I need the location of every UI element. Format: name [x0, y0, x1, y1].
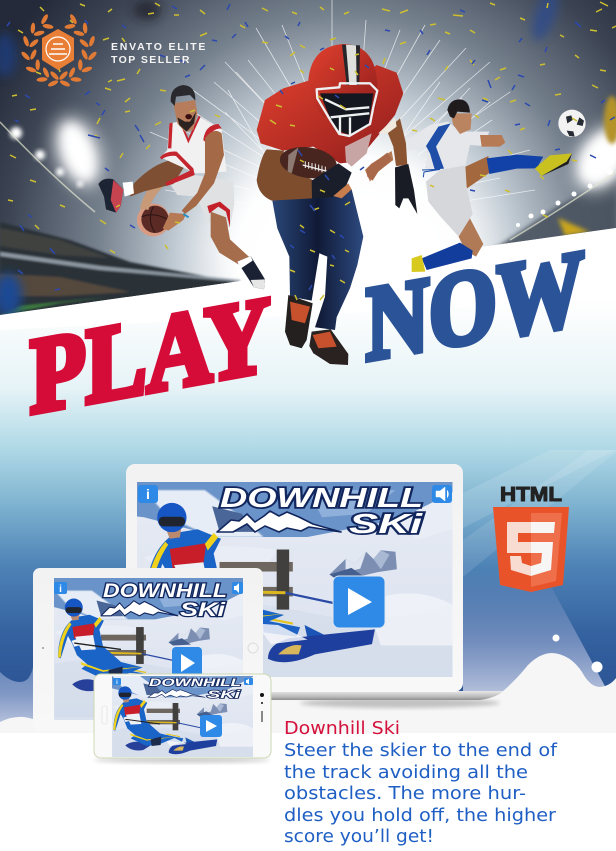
glow behind players	[470, 208, 490, 246]
game description: Steer the skier to the end of	[284, 740, 558, 761]
game title: SKi	[207, 689, 242, 701]
tablet camera and home button	[42, 643, 258, 653]
tablet	[33, 568, 263, 720]
tablet screen	[54, 578, 243, 720]
confetti over the photo	[7, 2, 616, 300]
shorts	[426, 165, 473, 237]
right glove	[395, 164, 417, 214]
badge emblem	[46, 37, 70, 61]
right arm	[387, 118, 407, 166]
heading: PLAY: PLAY	[30, 274, 270, 437]
raised leg	[130, 160, 184, 197]
chest pad	[345, 133, 372, 167]
lower leg	[211, 212, 251, 265]
lower leg	[457, 218, 483, 257]
crowd stands left	[0, 222, 241, 315]
phone shadow	[94, 757, 270, 763]
raised shoe	[98, 179, 123, 213]
kicking thigh	[464, 156, 491, 189]
info button: i	[59, 584, 62, 595]
forearm	[480, 135, 505, 147]
stadium roof arcs	[0, 122, 616, 240]
head	[447, 99, 472, 134]
info button: i	[146, 486, 150, 502]
laptop base	[250, 691, 503, 700]
game title	[148, 677, 242, 701]
kicking shoe	[535, 153, 572, 176]
stadium photo background	[0, 0, 616, 330]
hexagon	[42, 29, 74, 70]
sound button	[232, 582, 243, 594]
game title	[100, 582, 228, 618]
american football	[278, 143, 339, 182]
play button	[333, 576, 385, 628]
hand	[163, 213, 186, 231]
kicking sock	[487, 155, 543, 174]
game title	[216, 486, 426, 535]
lower shoe	[237, 256, 265, 289]
phone	[94, 674, 272, 765]
phone frame	[94, 674, 271, 758]
info button: i	[116, 680, 118, 686]
jersey	[161, 117, 227, 173]
game description: dles you hold off, the higher	[284, 805, 557, 826]
play button	[200, 715, 222, 737]
badge label: ENVATO ELITE	[111, 41, 207, 53]
tablet frame	[33, 568, 263, 731]
ball	[137, 204, 170, 236]
right stadium stands	[494, 181, 616, 245]
game title: DOWNHILL	[220, 482, 423, 513]
floodlights	[10, 108, 616, 227]
game description: the track avoiding all the	[284, 762, 528, 783]
laptop shadow	[300, 698, 500, 708]
game description	[284, 740, 558, 847]
badge label: TOP SELLER	[111, 54, 191, 66]
laptop	[126, 464, 503, 710]
jersey	[407, 122, 489, 170]
dark and gold confetti blurs	[0, 0, 616, 317]
snow blobs	[0, 634, 616, 733]
lower shoe	[412, 255, 425, 272]
badge label	[111, 41, 207, 66]
jersey	[257, 65, 403, 163]
info button	[138, 485, 158, 503]
game name: Downhill Ski	[284, 718, 400, 739]
forearm	[257, 149, 313, 201]
back arm	[140, 182, 166, 210]
sock	[123, 182, 134, 197]
game title: SKi	[349, 508, 424, 539]
soccer player	[365, 99, 586, 272]
icon: HTML5 logo	[493, 484, 569, 592]
right shoe	[309, 329, 348, 365]
head	[171, 85, 197, 132]
glove	[312, 163, 352, 198]
back arm	[365, 151, 393, 182]
game description: obstacles. The more hur-	[284, 783, 526, 804]
game title: SKi	[180, 600, 226, 621]
shorts	[167, 175, 234, 227]
lower background light rays	[463, 450, 616, 577]
football player	[257, 44, 417, 365]
helmet	[308, 44, 377, 136]
sound button	[244, 678, 253, 685]
phone screen	[112, 676, 253, 757]
laurel wreath	[20, 13, 98, 88]
basketball player	[98, 85, 265, 289]
periwinkle wave with dark drips	[0, 570, 607, 722]
laptop screen	[137, 482, 452, 677]
lower sock	[422, 243, 473, 270]
front arm	[182, 131, 224, 214]
laptop frame	[126, 464, 463, 692]
game title: DOWNHILL	[149, 677, 241, 689]
white diagonal band	[0, 228, 616, 330]
game title: DOWNHILL	[103, 581, 227, 602]
icon: HTML5 logo: HTML	[500, 484, 562, 506]
firework sparks	[150, 0, 535, 205]
back arm and hand	[366, 153, 392, 181]
left shoe	[285, 295, 313, 348]
info button	[54, 582, 67, 595]
phone controls	[102, 693, 264, 724]
info button	[113, 678, 121, 685]
description text block	[284, 718, 558, 847]
game description: score you’ll get!	[284, 826, 434, 847]
play button	[172, 647, 202, 674]
sound button	[432, 485, 452, 503]
envato badge	[20, 13, 98, 88]
pants	[272, 189, 363, 330]
soccer ball	[558, 110, 586, 137]
